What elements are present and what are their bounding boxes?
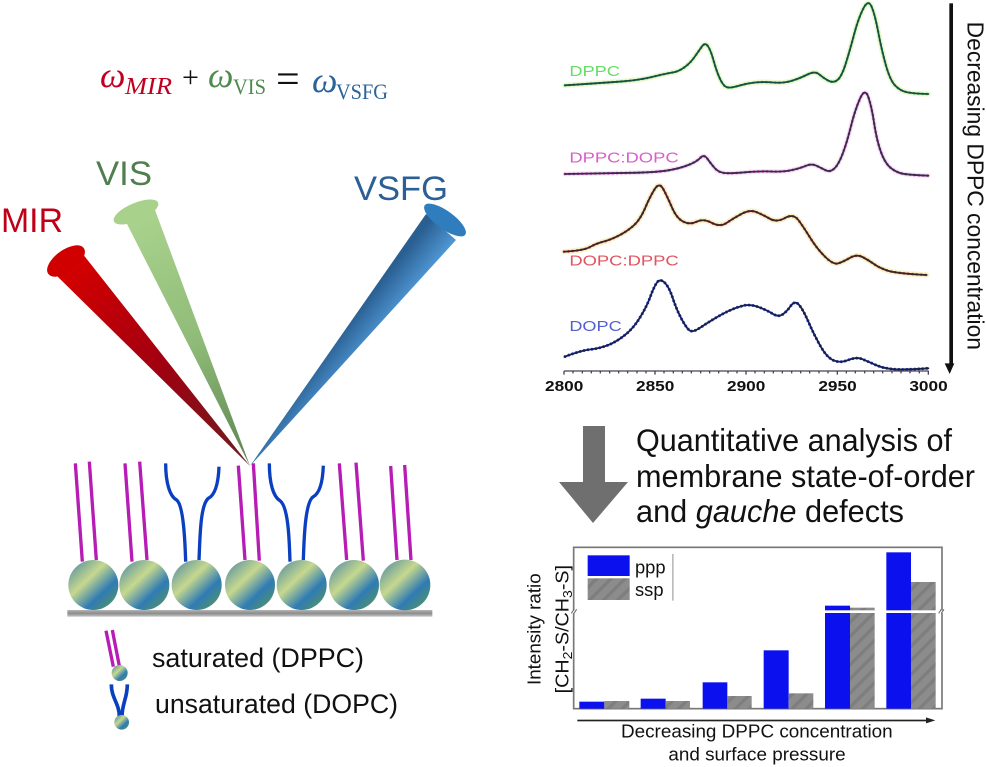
- equation: frequency sum: =: [276, 57, 300, 103]
- arrow: large grey down arrow: [559, 426, 628, 523]
- label: DOPC: DOPC: [569, 319, 622, 335]
- y axis label units: -S]: [552, 565, 573, 590]
- spectrum: DPPC: [565, 3, 928, 94]
- legend: [588, 554, 674, 601]
- x axis label: [621, 720, 893, 765]
- label: MIR: MIR: [1, 202, 63, 240]
- equation: frequency sum: VSFG: [336, 79, 388, 104]
- bars: ssp: [604, 582, 936, 709]
- y axis label units: 3: [560, 590, 575, 598]
- icon: saturated lipid: [106, 630, 128, 681]
- plot frame: [574, 547, 942, 709]
- unsaturated tails: [166, 463, 323, 562]
- text: quantitative analysis: [636, 422, 975, 529]
- beam: MIR cone: [42, 239, 250, 466]
- arrow: decreasing concentration: [945, 3, 954, 374]
- x axis arrow: [577, 717, 935, 723]
- spectrum: DOPC:DPPC: [564, 185, 927, 275]
- icon: unsaturated lipid: [111, 684, 129, 730]
- y axis label units: -S/CH: [552, 598, 573, 652]
- x axis label: and surface pressure: [668, 744, 846, 765]
- label: VSFG: VSFG: [354, 170, 448, 208]
- x axis: 2850: [636, 379, 674, 395]
- y axis label: Intensity ratio: [524, 573, 545, 685]
- x axis: 3000: [909, 379, 948, 395]
- bars: ppp: [579, 552, 911, 709]
- y axis label units: 2: [560, 652, 575, 659]
- equation: frequency sum: ω: [312, 60, 337, 100]
- y axis label units: [CH: [552, 661, 573, 693]
- x axis: 2950: [818, 379, 857, 395]
- x axis: 2900: [727, 379, 765, 395]
- text: quantitative analysis: membrane state-of-order: [636, 458, 975, 494]
- text: quantitative analysis: and gauche defects: [636, 493, 904, 529]
- spectrum: DPPC:DOPC: [565, 93, 928, 176]
- spectrum: DOPC: [565, 280, 928, 369]
- saturated tails: [75, 462, 411, 562]
- equation: frequency sum: ω: [208, 55, 233, 95]
- text: saturated: saturated (DPPC): [152, 643, 364, 673]
- text: unsaturated: unsaturated (DOPC): [155, 689, 398, 719]
- text: quantitative analysis: Quantitative analysis of: [636, 422, 952, 458]
- equation: frequency sum: [100, 55, 388, 104]
- label: DPPC: DPPC: [569, 64, 620, 80]
- chart: VSFG spectra: [545, 3, 986, 395]
- chart: intensity ratio bars: [524, 547, 946, 765]
- equation: frequency sum: ω: [100, 55, 125, 95]
- x axis: [545, 371, 948, 395]
- equation: frequency sum: MIR: [124, 74, 172, 100]
- label: DOPC:DPPC: DOPC:DPPC: [569, 254, 679, 270]
- equation: frequency sum: +: [182, 61, 199, 94]
- legend: ppp: [635, 556, 666, 577]
- label: DPPC:DOPC: DPPC:DOPC: [569, 150, 679, 166]
- beam: VSFG cone: [250, 198, 471, 466]
- lipid head groups: [68, 560, 430, 610]
- equation: frequency sum: VIS: [233, 74, 266, 99]
- substrate bar: [67, 610, 432, 617]
- legend: ssp: [635, 579, 664, 600]
- label: VIS: VIS: [96, 155, 152, 193]
- beam: VIS cone: [110, 194, 250, 466]
- x axis label: Decreasing DPPC concentration: [621, 720, 893, 741]
- legend: lipid types: [106, 630, 398, 730]
- axis break: [570, 609, 946, 613]
- lipid monolayer diagram: [67, 462, 432, 617]
- x axis: 2800: [545, 379, 583, 395]
